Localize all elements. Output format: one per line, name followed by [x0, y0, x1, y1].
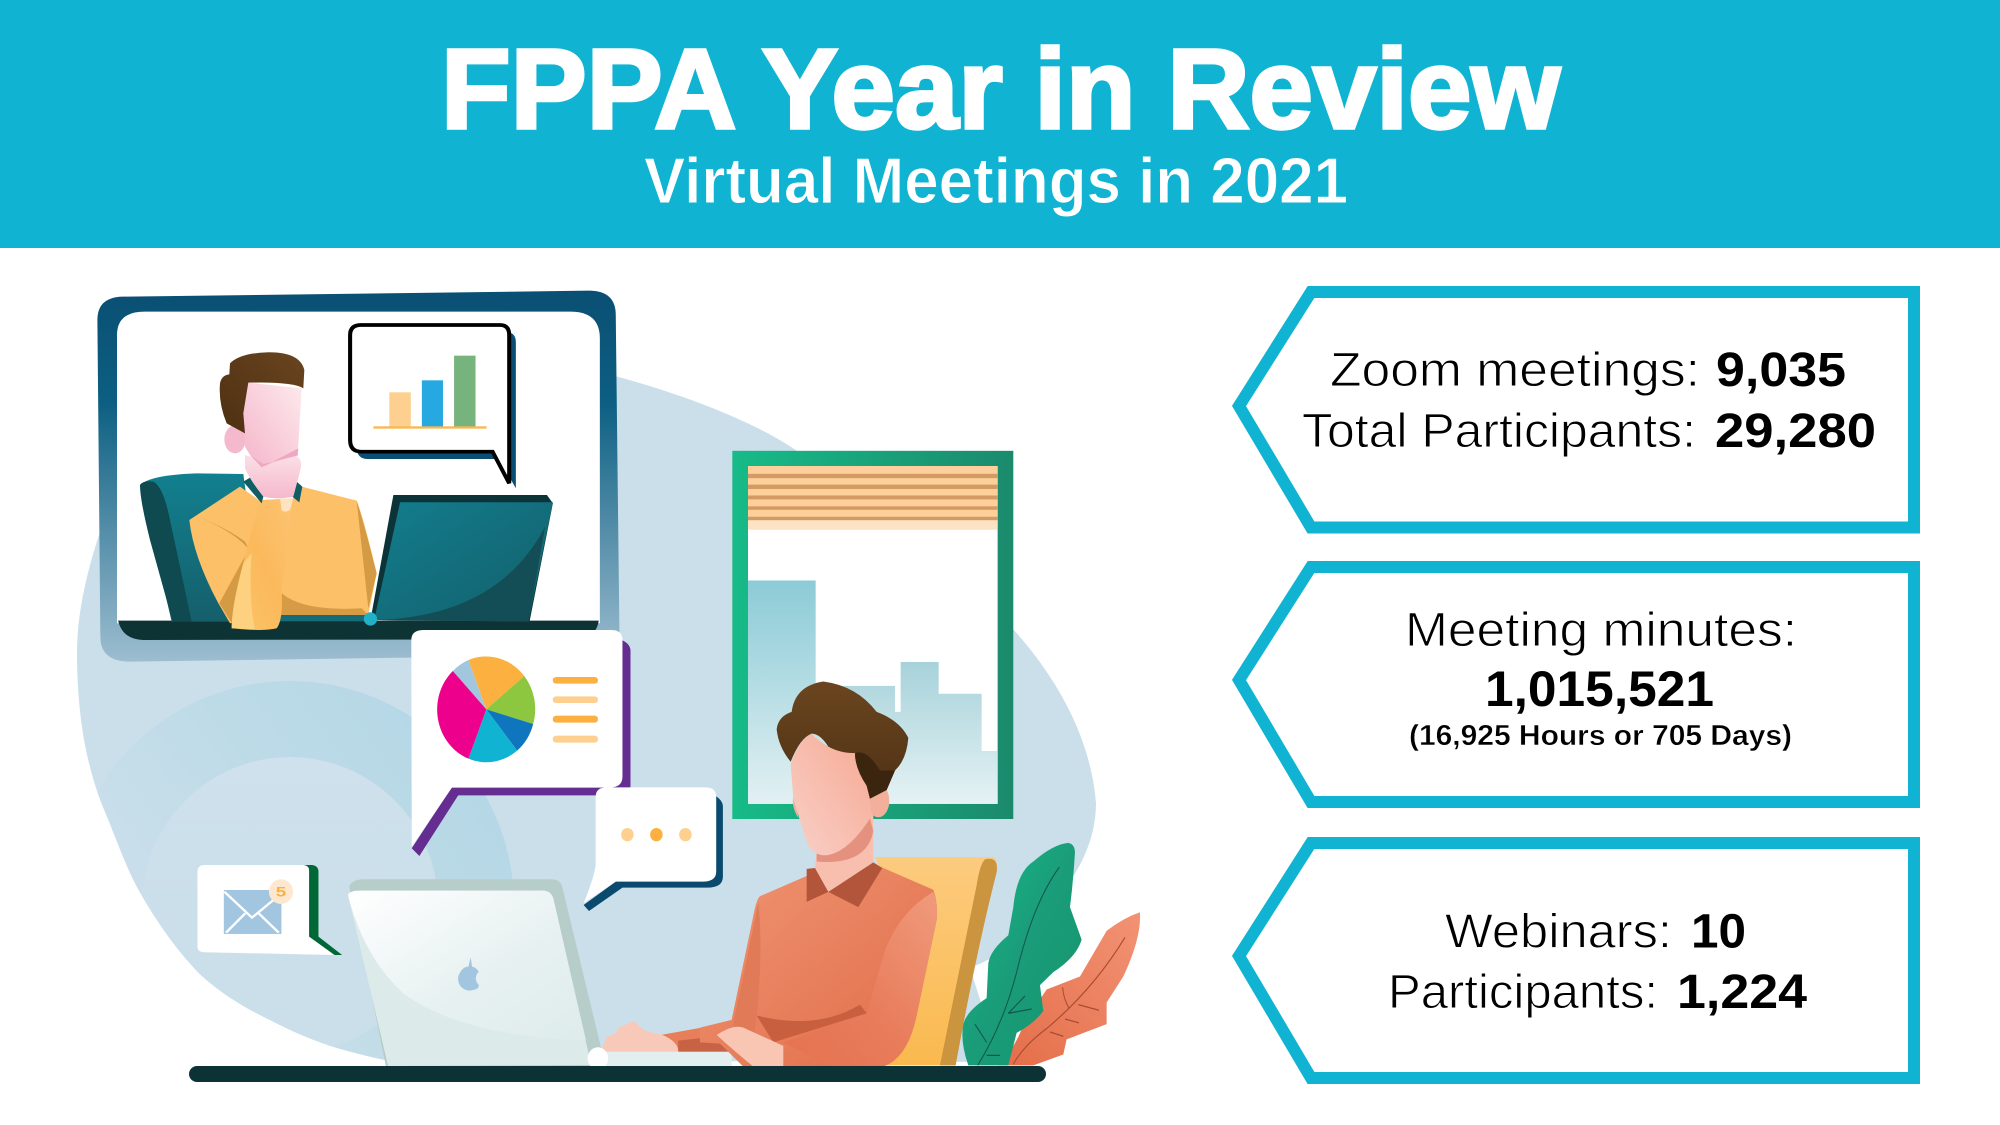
remote laptop [364, 495, 553, 626]
stat box: zoom meetings [1239, 292, 1914, 528]
title: FPPA Year in Review [441, 26, 1561, 152]
apple logo [458, 957, 479, 991]
background rings [97, 681, 512, 1060]
person at laptop [700, 682, 937, 1068]
window with city view [732, 451, 1013, 819]
yellow office chair [875, 857, 997, 1065]
bubbles and laptop [197, 630, 747, 1069]
laptop hinge dot [588, 1047, 608, 1069]
total participants line [1302, 405, 1876, 458]
monitor frame and screen [97, 291, 619, 662]
bar chart speech bubble [350, 325, 516, 488]
total participants line: 29,280 [1715, 405, 1876, 458]
zoom meetings line [1330, 344, 1846, 397]
illustration: virtual meeting scene [66, 291, 1140, 1125]
person, chair and plants [700, 682, 1140, 1068]
window blind [748, 466, 998, 530]
stat box: webinars [1239, 843, 1914, 1078]
remote person chair [140, 473, 373, 622]
webinars line: Webinars: [1445, 906, 1672, 958]
remote person [140, 352, 377, 630]
envelope icon: 5 [276, 884, 286, 900]
zoom meetings line: 9,035 [1716, 344, 1846, 397]
legend lines [553, 677, 598, 743]
green leaf [962, 843, 1082, 1065]
city buildings [748, 580, 998, 804]
stat box: meeting minutes [1239, 567, 1914, 802]
subtitle: Virtual Meetings in 2021 [644, 144, 1348, 217]
pie chart [437, 656, 535, 762]
video call monitor [97, 291, 619, 662]
meeting minutes label: Meeting minutes: [1405, 604, 1797, 657]
remote laptop and speech bubble [350, 325, 553, 626]
meeting minutes value: 1,015,521 [1485, 661, 1714, 717]
hours and days note: (16,925 Hours or 705 Days) [1409, 720, 1792, 752]
participants line: Participants: [1388, 966, 1658, 1019]
pie chart speech bubble [411, 630, 630, 856]
desk bar [189, 1066, 1046, 1082]
participants line: 1,224 [1677, 966, 1807, 1019]
background blob [77, 372, 1096, 1062]
header banner [0, 0, 2000, 248]
typing hand [601, 1021, 747, 1052]
typing dots speech bubble [584, 787, 723, 911]
participants line [1388, 966, 1807, 1019]
orange leaf [998, 912, 1140, 1065]
webinars line: 10 [1691, 906, 1746, 958]
envelope icon [224, 879, 293, 934]
zoom meetings line: Zoom meetings: [1330, 344, 1700, 397]
front laptop [348, 879, 732, 1066]
bar chart [373, 356, 487, 429]
email speech bubble [197, 865, 342, 955]
total participants line: Total Participants: [1302, 405, 1696, 458]
